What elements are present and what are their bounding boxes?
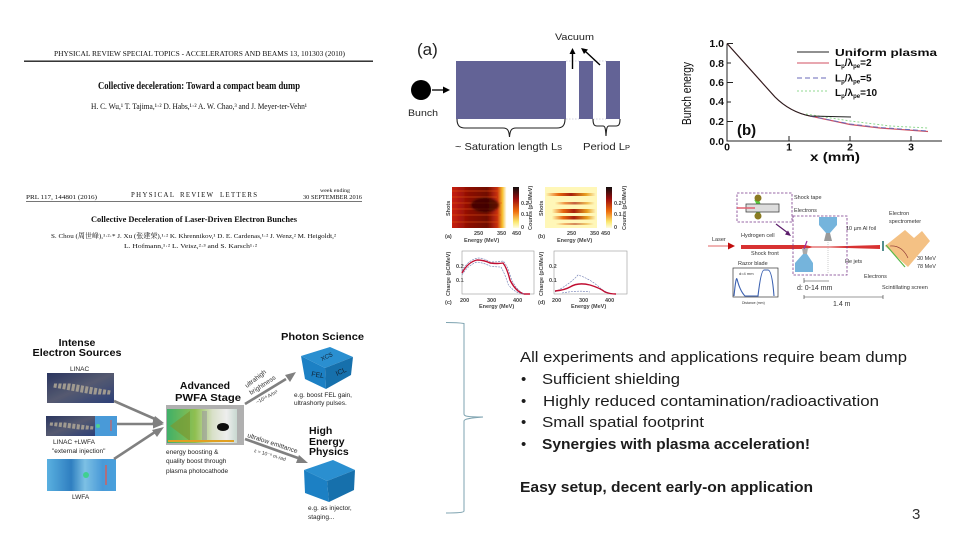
setup labels: Electrons xyxy=(864,274,887,280)
legend: =10 xyxy=(860,88,878,99)
legend: L xyxy=(835,88,841,99)
legend: =5 xyxy=(860,74,872,84)
spectrometer xyxy=(883,230,930,267)
photon science block: ICL xyxy=(335,367,348,378)
setup labels: Scintillating screen xyxy=(882,285,928,291)
paper header: Physical Review Letters 2016: PHYSICAL xyxy=(131,192,174,199)
setup labels xyxy=(712,195,936,308)
tick labels: 0.4 xyxy=(709,96,724,108)
heatmap and chart labels: 250 xyxy=(567,231,576,237)
source: LINAC xyxy=(47,366,114,403)
heatmap and chart labels: Shots xyxy=(446,201,452,216)
saturation length brace xyxy=(457,119,565,137)
paper header: Physical Review ST-AB 2010: H. C. Wu,¹ T. Tajima,¹·² D. Habs,¹·² A. W. Chao,³ and J. Meyer-ter-Vehn¹ xyxy=(91,102,307,111)
heatmap and chart labels: 400 xyxy=(605,298,614,304)
experimental setup schematic xyxy=(708,193,936,308)
heatmap and chart labels: 450 xyxy=(512,231,521,237)
source heading: Electron Sources xyxy=(32,347,122,359)
heatmap and chart labels: Charge (pC/MeV) xyxy=(446,252,452,296)
paper header: Physical Review Letters 2016: PRL 117, 144801 (2016) xyxy=(26,194,97,201)
legend: /λ xyxy=(845,58,854,69)
diagram (a): bunch and plasma dump: Bunch xyxy=(408,108,438,119)
tick labels: 1.0 xyxy=(709,38,724,50)
setup labels: He jets xyxy=(845,259,862,265)
PWFA concept diagram xyxy=(32,332,364,521)
charge spectrum d xyxy=(554,251,627,294)
stage xyxy=(166,380,244,475)
arrow captions: ultralow emittance xyxy=(246,432,299,455)
heatmap and chart labels xyxy=(445,186,628,310)
heatmap and chart labels: (c) xyxy=(445,300,452,306)
heatmap and chart labels: 200 xyxy=(552,298,561,304)
laser beam xyxy=(741,245,880,249)
density inset plot xyxy=(733,268,778,297)
high energy physics block: High xyxy=(309,425,332,437)
tick labels: 0.8 xyxy=(709,58,724,70)
source: LWFA xyxy=(47,459,116,501)
paper header: Physical Review Letters 2016: week ending xyxy=(320,189,351,194)
photon science block: XCS xyxy=(320,352,334,363)
heatmap and chart labels: (b) xyxy=(538,234,545,240)
legend: =2 xyxy=(860,58,872,69)
source: LINAC + LWFA: "external injection" xyxy=(52,448,106,455)
setup labels: d: 0-14 mm xyxy=(797,285,833,292)
charge spectrum c xyxy=(462,251,534,294)
heatmap and chart labels: 300 xyxy=(579,298,588,304)
setup labels: spectrometer xyxy=(889,219,921,225)
heatmap and chart labels: 0.2 xyxy=(614,201,622,207)
page number: 3 xyxy=(912,506,920,523)
purple pointer arrow xyxy=(776,224,788,233)
diagram (a): bunch and plasma dump xyxy=(408,32,630,153)
text block: beam dump requirements: • xyxy=(521,393,526,410)
photon science block: FEL xyxy=(311,371,325,380)
heatmap and chart labels: 0.2 xyxy=(521,201,529,207)
high energy physics block: Physics xyxy=(309,446,349,458)
heatmap and chart labels: 300 xyxy=(487,298,496,304)
heatmap and chart labels: 250 xyxy=(474,231,483,237)
paper header: Physical Review ST-AB 2010: Collective deceleration: Toward a compact beam dump xyxy=(98,81,300,92)
heatmap and chart labels: Counts (pC/MeV) xyxy=(528,186,534,230)
text block: beam dump requirements: Highly reduced contamination/radioactivation xyxy=(543,393,879,410)
setup labels: 30 MeV xyxy=(917,256,936,262)
heatmap and chart labels: Energy (MeV) xyxy=(557,238,592,244)
heatmap and chart labels: Counts (pC/MeV) xyxy=(622,186,628,230)
vacuum arrows xyxy=(570,48,600,69)
line chart (b): bunch energy vs x: 1 xyxy=(786,142,792,154)
axes xyxy=(727,44,942,141)
line chart (b): bunch energy vs x: 2 xyxy=(847,142,853,154)
setup labels: d=4 mm xyxy=(739,271,754,276)
high energy physics block: Energy xyxy=(309,436,345,448)
output arrows xyxy=(245,372,308,463)
legend: L xyxy=(835,74,841,84)
heatmap and chart labels: Shots xyxy=(539,201,545,216)
heatmap and chart labels: 0.2 xyxy=(549,264,557,270)
legend: p xyxy=(841,94,845,100)
high energy physics block: staging... xyxy=(308,514,335,521)
paper header: Physical Review Letters 2016: LETTERS xyxy=(220,192,257,199)
tick labels: 0.6 xyxy=(709,77,724,89)
stage: plasma photocathode xyxy=(166,468,229,475)
line chart (b): bunch energy vs x: Bunch energy xyxy=(680,61,694,125)
paper header: Physical Review ST-AB 2010: PHYSICAL REVIEW SPECIAL TOPICS - ACCELERATORS AND BEAMS 13, 101303 (2010) xyxy=(54,49,345,58)
setup labels: 78 MeV xyxy=(917,264,936,270)
legend: L xyxy=(835,58,841,69)
setup labels: 10 µm Al foil xyxy=(846,226,876,232)
setup labels: Distance (mm) xyxy=(742,301,765,305)
text block: beam dump requirements: Easy setup, decent early-on application xyxy=(520,479,813,496)
paper header: Physical Review Letters 2016: 30 SEPTEMBER 2016 xyxy=(303,194,362,201)
tick labels: 0.2 xyxy=(709,116,724,128)
line chart (b): bunch energy vs x xyxy=(680,38,942,164)
diagram (a): bunch and plasma dump: ~ Saturation length L S xyxy=(455,141,562,153)
heatmap and chart labels: 0.1 xyxy=(549,278,557,284)
heatmap b xyxy=(545,187,612,228)
heatmap a xyxy=(452,187,519,228)
legend: Uniform plasma xyxy=(835,48,938,59)
heatmap and chart labels: Charge (pC/MeV) xyxy=(539,252,545,296)
legend: /λ xyxy=(845,74,854,84)
plasma blocks xyxy=(456,61,620,119)
heatmap and chart labels: 0 xyxy=(614,225,617,231)
paper header: Physical Review Letters 2016: L. Hofmann,¹·² L. Veisz,²·³ and S. Karsch¹·² xyxy=(124,243,257,250)
text block: beam dump requirements: • xyxy=(521,436,526,453)
setup labels: Razor blade xyxy=(738,261,768,267)
setup labels: Hydrogen cell xyxy=(741,233,775,239)
photon science block: Photon Science xyxy=(281,332,364,343)
dimension lines xyxy=(804,278,883,299)
heatmap and chart labels: 0.2 xyxy=(456,264,464,270)
high energy physics block xyxy=(304,425,355,521)
text block: beam dump requirements: Sufficient shielding xyxy=(542,371,680,388)
text block: beam dump requirements: All experiments and applications require beam dump xyxy=(520,349,907,366)
source: LINAC: LINAC xyxy=(70,366,89,373)
heatmap and chart labels: 0 xyxy=(521,225,524,231)
source: LINAC + LWFA xyxy=(46,416,117,455)
line chart (b): bunch energy vs x: 3 xyxy=(908,142,914,154)
source heading xyxy=(32,337,122,359)
high energy physics block: e.g. as injector, xyxy=(308,505,352,512)
arrow captions: ultrahigh xyxy=(244,368,268,390)
source arrows xyxy=(114,401,164,459)
paper header: Physical Review Letters 2016: S. Chou (周世峰),¹·²·* J. Xu (张建荣),¹·² K. Khrennikov,¹ D. E. Cardenas,¹·² J. Wenz,² M. Heigoldt,² xyxy=(51,231,336,240)
heatmap and chart labels: (a) xyxy=(445,234,452,240)
legend: /λ xyxy=(845,88,854,99)
curly bracket xyxy=(446,322,483,513)
setup labels: Electron xyxy=(889,211,909,217)
paper header: Physical Review Letters 2016 xyxy=(26,189,362,250)
photon science block xyxy=(281,332,364,407)
bunch circle with arrow xyxy=(411,80,450,100)
paper header: Physical Review ST-AB 2010 xyxy=(24,49,373,111)
period brace xyxy=(593,119,620,136)
arrow captions: ~10¹⁸ A/m² xyxy=(255,389,279,406)
legend: pe xyxy=(853,94,861,100)
heatmap and chart labels: Energy (MeV) xyxy=(464,238,499,244)
data curves xyxy=(727,44,928,132)
text block: beam dump requirements: • xyxy=(521,371,526,388)
heatmap and chart labels: Energy (MeV) xyxy=(571,304,606,310)
setup labels: 1.4 m xyxy=(833,301,851,308)
heatmap and chart labels: 0.1 xyxy=(614,212,622,218)
paper header: Physical Review Letters 2016: Collective Deceleration of Laser-Driven Electron Bunches xyxy=(91,215,297,224)
heatmap and chart labels: Energy (MeV) xyxy=(479,304,514,310)
tick labels xyxy=(709,38,724,148)
gas jet box xyxy=(793,216,847,275)
text block: beam dump requirements xyxy=(520,349,907,496)
line chart (b): bunch energy vs x: (b) xyxy=(737,122,756,139)
diagram (a): bunch and plasma dump: (a) xyxy=(417,40,438,59)
arrow captions: ε ≈ 10⁻⁸ m·rad xyxy=(253,448,287,463)
vacuum gap dotted edges xyxy=(566,61,606,119)
text block: beam dump requirements: • xyxy=(521,414,526,431)
heatmaps and charge spectra xyxy=(445,186,628,310)
heatmap and chart labels: 450 xyxy=(601,231,610,237)
heatmap and chart labels: 0.1 xyxy=(521,212,529,218)
stage: PWFA Stage xyxy=(175,392,241,404)
inset: hydrogen cell xyxy=(737,193,792,222)
legend: pe xyxy=(853,80,861,86)
line chart (b): bunch energy vs x: 0 xyxy=(724,142,730,154)
heatmap and chart labels: 350 xyxy=(497,231,506,237)
line chart (b): bunch energy vs x: x (mm) xyxy=(810,150,860,164)
source: LWFA: LWFA xyxy=(72,494,90,501)
legend: p xyxy=(841,80,845,86)
stage: energy boosting & xyxy=(166,449,219,456)
photon science block: ultrashorty pulses. xyxy=(294,400,347,407)
setup labels: Shock tape xyxy=(794,195,822,201)
legend: p xyxy=(841,64,845,70)
stage: quality boost through xyxy=(166,458,227,465)
legend: pe xyxy=(853,64,861,70)
source heading: Intense xyxy=(59,337,96,349)
text block: beam dump requirements: Small spatial footprint xyxy=(542,414,705,431)
legend xyxy=(797,48,938,100)
arrow captions: brightness xyxy=(248,374,278,397)
diagram (a): bunch and plasma dump: Vacuum xyxy=(555,32,594,43)
paper header: Physical Review Letters 2016: REVIEW xyxy=(180,192,214,199)
tick labels: 0.0 xyxy=(709,136,724,148)
photon science block: e.g. boost FEL gain, xyxy=(294,392,352,399)
stage: Advanced xyxy=(180,380,230,392)
setup labels: Laser xyxy=(712,237,726,243)
arrow captions xyxy=(244,368,299,463)
setup labels: Shock front xyxy=(751,251,779,257)
heatmap and chart labels: 0.1 xyxy=(456,278,464,284)
text block: beam dump requirements: Synergies with plasma acceleration! xyxy=(542,436,810,453)
heatmap and chart labels: 350 xyxy=(590,231,599,237)
heatmap and chart labels: 200 xyxy=(460,298,469,304)
diagram (a): bunch and plasma dump: Period L P xyxy=(583,141,630,153)
heatmap and chart labels: (d) xyxy=(538,300,545,306)
source: LINAC + LWFA: LINAC +LWFA xyxy=(53,439,96,446)
setup labels: Electrons xyxy=(794,208,817,214)
heatmap and chart labels: 400 xyxy=(513,298,522,304)
